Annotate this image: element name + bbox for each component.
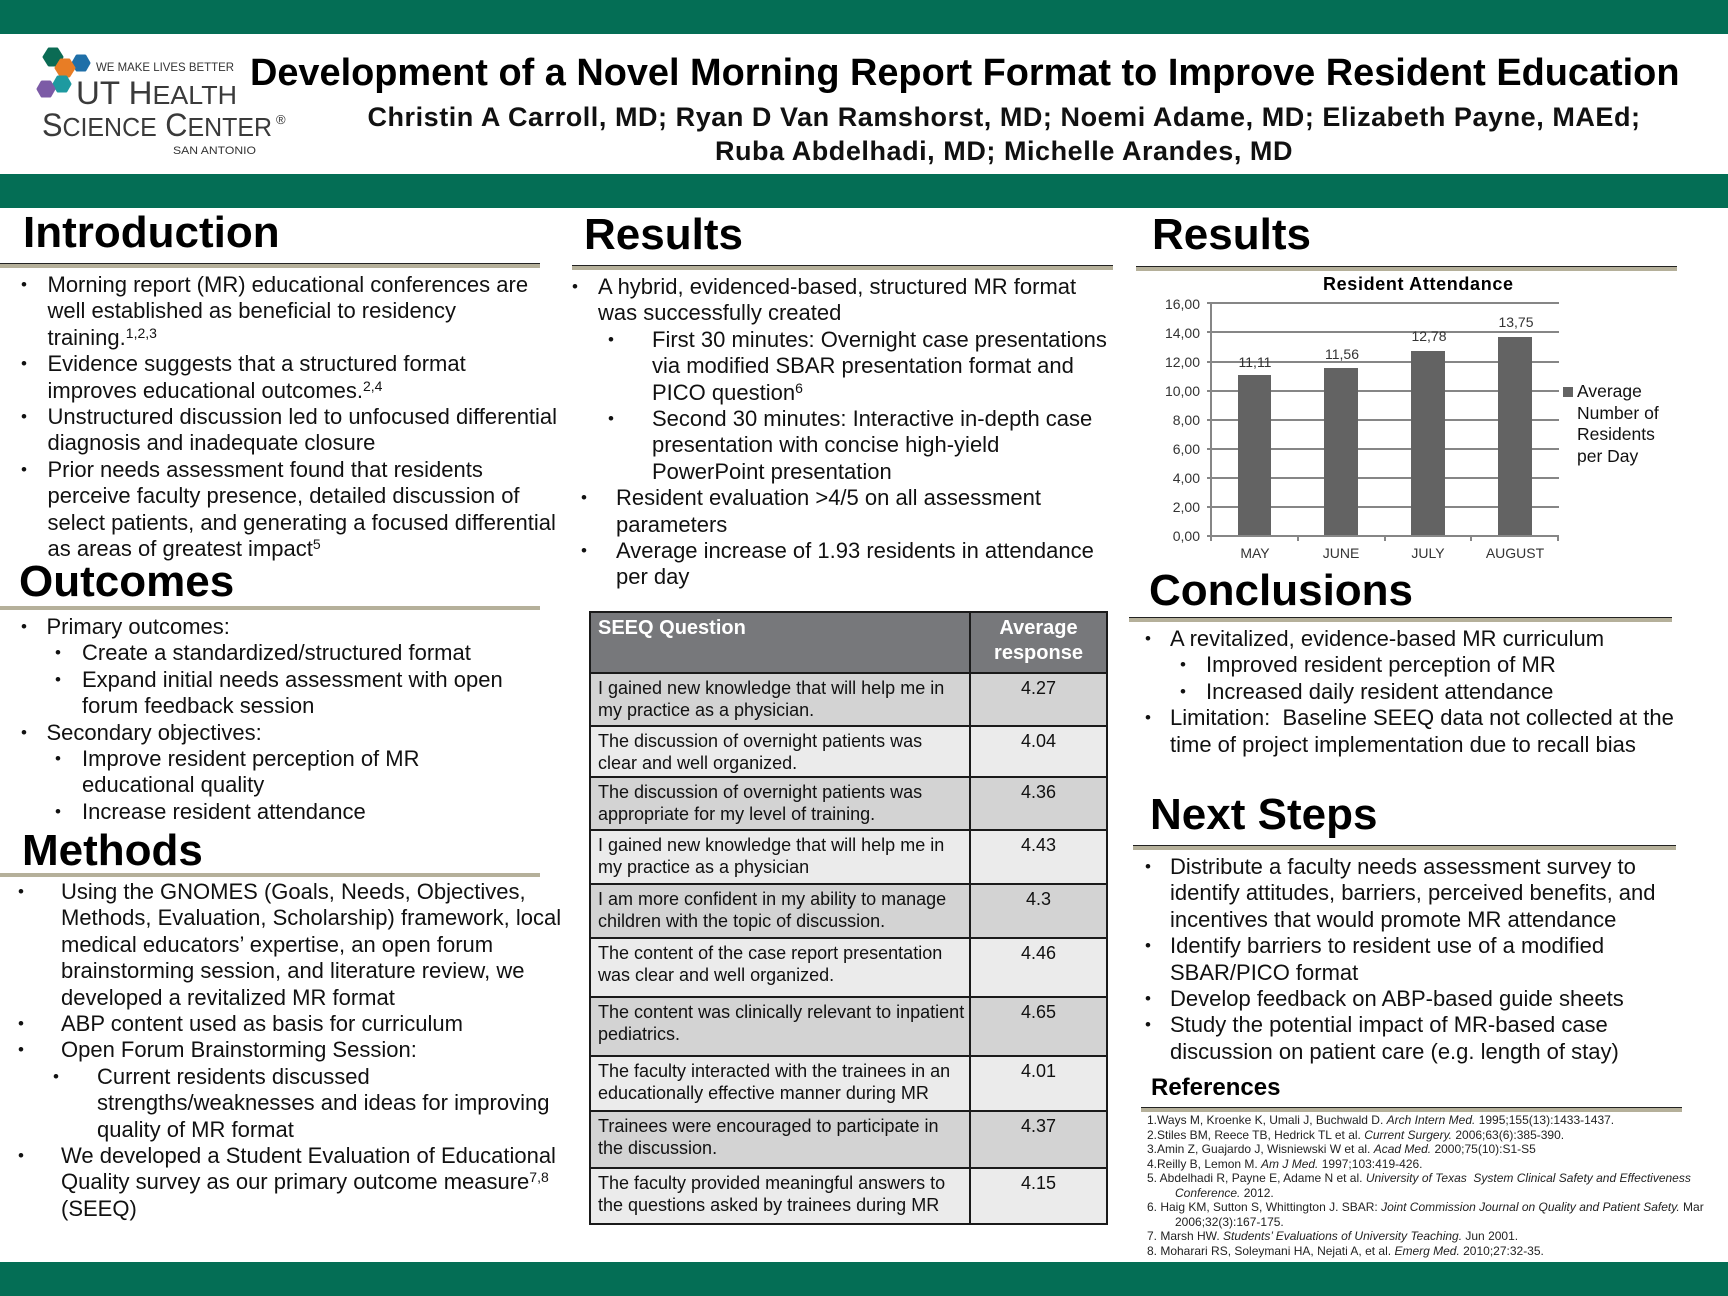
table: SEEQ question average responses: I am more confident in my ability to manage: [598, 889, 946, 909]
table: SEEQ question average responses: my practice as a physician.: [598, 700, 814, 720]
introduction bullets: •: [21, 275, 27, 294]
table: SEEQ question average responses: I gained new knowledge that will help me in: [598, 835, 944, 855]
results bullets: •: [608, 409, 614, 428]
methods bullets: medical educators’ expertise, an open forum: [61, 932, 493, 957]
results bullets: •: [581, 488, 587, 507]
introduction bullets: •: [21, 354, 27, 373]
table: SEEQ question average responses: SEEQ Question: [598, 617, 746, 639]
outcomes bullets: Create a standardized/structured format: [82, 640, 471, 665]
introduction bullets: training.1,2,3: [48, 325, 157, 350]
table: SEEQ question average responses: Average: [999, 617, 1078, 639]
data labels: 11,56: [1325, 346, 1359, 362]
table: SEEQ question average responses: clear and well organized.: [598, 753, 797, 773]
y axis labels: 10,00: [1165, 383, 1200, 399]
introduction bullets: Morning report (MR) educational conferences are: [48, 272, 528, 297]
methods bullets: •: [18, 1146, 24, 1165]
results bullets: PICO question6: [652, 380, 803, 405]
table: SEEQ question average responses: The faculty provided meaningful answers to: [598, 1173, 945, 1193]
next steps bullets: Develop feedback on ABP-based guide sheets: [1170, 986, 1624, 1011]
panel: methods: [0, 826, 561, 1221]
methods bullets: developed a revitalized MR format: [61, 985, 395, 1010]
next steps bullets: •: [1145, 1015, 1151, 1034]
results bullets: •: [608, 330, 614, 349]
authors: [367, 102, 1641, 166]
top green band: [0, 0, 1728, 34]
reference list: 4.Reilly B, Lemon M. Am J Med. 1997;103:419-426.: [1147, 1156, 1422, 1170]
methods bullets: •: [18, 1040, 24, 1059]
heading: Results: Results: [1152, 210, 1311, 259]
reference list: 6. Haig KM, Sutton S, Whittington J. SBAR: Joint Commission Journal on Quality and Patient Safety. Mar: [1147, 1200, 1704, 1214]
table: SEEQ question average responses: I gained new knowledge that will help me in: [598, 678, 944, 698]
heading: Conclusions: Conclusions: [1149, 566, 1413, 615]
outcomes bullets: •: [55, 670, 61, 689]
introduction bullets: •: [21, 460, 27, 479]
table: SEEQ question average responses: The discussion of overnight patients was: [598, 731, 922, 751]
outcomes bullets: Expand initial needs assessment with open: [82, 667, 503, 692]
reference list: 2.Stiles BM, Reece TB, Hedrick TL et al. Current Surgery. 2006;63(6):385-390.: [1147, 1128, 1564, 1142]
x axis labels: [1240, 545, 1545, 561]
table: SEEQ question average responses: The content was clinically relevant to inpatient: [598, 1002, 964, 1022]
heading: Methods: Methods: [22, 826, 203, 875]
y axis labels: [1165, 296, 1200, 544]
methods bullets: (SEEQ): [61, 1196, 137, 1221]
conclusions bullets: •: [1180, 655, 1186, 674]
y axis labels: 16,00: [1165, 296, 1200, 312]
bar chart: resident attendance: [1165, 274, 1659, 561]
panel: results chart: [1136, 210, 1677, 561]
table: SEEQ question average responses: 4.37: [1021, 1116, 1056, 1136]
reference list: 8. Moharari RS, Soleymani HA, Nejati A, et al. Emerg Med. 2010;27:32-35.: [1147, 1244, 1544, 1258]
table: SEEQ question average responses: pediatrics.: [598, 1024, 680, 1044]
chart title: Resident Attendance: [1323, 274, 1513, 294]
x axis labels: JULY: [1411, 545, 1445, 561]
x axis labels: JUNE: [1323, 545, 1359, 561]
table: SEEQ question average responses: 4.65: [1021, 1002, 1056, 1022]
reference list: Conference. 2012.: [1175, 1186, 1274, 1200]
y axis labels: 8,00: [1173, 412, 1200, 428]
y axis labels: 2,00: [1173, 499, 1200, 515]
conclusions bullets: Increased daily resident attendance: [1206, 679, 1553, 704]
table: SEEQ question average responses: appropriate for my level of training.: [598, 804, 875, 824]
panel: outcomes: [0, 557, 540, 824]
y axis labels: 14,00: [1165, 325, 1200, 341]
university logo: SCIENCE CENTER: [42, 107, 272, 143]
bars: [1238, 337, 1532, 535]
university logo: WE MAKE LIVES BETTER: [96, 62, 234, 74]
introduction bullets: diagnosis and inadequate closure: [48, 430, 375, 455]
table: SEEQ question average responses: 4.01: [1021, 1061, 1056, 1081]
next steps bullets: incentives that would promote MR attendance: [1170, 907, 1616, 932]
table: SEEQ question average responses: 4.04: [1021, 731, 1056, 751]
results bullets: PowerPoint presentation: [652, 459, 892, 484]
table: SEEQ question average responses: educationally effective manner during MR: [598, 1083, 929, 1103]
introduction bullets: perceive faculty presence, detailed discussion of: [48, 483, 520, 508]
reference list: 2006;32(3):167-175.: [1175, 1214, 1284, 1228]
next steps bullets: identify attitudes, barriers, perceived benefits, and: [1170, 880, 1656, 905]
table: SEEQ question average responses: 4.43: [1021, 835, 1056, 855]
authors: Christin A Carroll, MD; Ryan D Van Ramshorst, MD; Noemi Adame, MD; Elizabeth Payne, MAEd;: [367, 102, 1641, 132]
heading: References: References: [1151, 1074, 1280, 1101]
data labels: 12,78: [1411, 328, 1447, 344]
introduction bullets: as areas of greatest impact5: [48, 536, 321, 561]
next steps bullets: discussion on patient care (e.g. length of stay): [1170, 1039, 1619, 1064]
panel: introduction: [0, 208, 557, 561]
reference list: 7. Marsh HW. Students’ Evaluations of University Teaching. Jun 2001.: [1147, 1229, 1518, 1243]
legend: Residents: [1577, 424, 1655, 444]
legend: per Day: [1577, 446, 1639, 466]
conclusions bullets: •: [1145, 708, 1151, 727]
panel: conclusions: [1129, 566, 1674, 757]
methods bullets: quality of MR format: [97, 1117, 294, 1142]
methods bullets: [18, 879, 561, 1221]
outcomes bullets: educational quality: [82, 772, 264, 797]
heading: Outcomes: Outcomes: [19, 557, 234, 606]
table: SEEQ question average responses: 4.36: [1021, 782, 1056, 802]
conclusions bullets: time of project implementation due to recall bias: [1170, 732, 1636, 757]
table: SEEQ question average responses: 4.15: [1021, 1173, 1056, 1193]
reference list: 5. Abdelhadi R, Payne E, Adame N et al. University of Texas System Clinical Safety and Effectiveness: [1147, 1171, 1691, 1185]
methods bullets: strengths/weaknesses and ideas for improving: [97, 1090, 549, 1115]
results bullets: •: [581, 541, 587, 560]
methods bullets: •: [18, 882, 24, 901]
next steps bullets: [1145, 854, 1656, 1064]
legend: [1563, 381, 1659, 466]
methods bullets: ABP content used as basis for curriculum: [61, 1011, 463, 1036]
reference list: [1147, 1113, 1704, 1258]
title: Development of a Novel Morning Report Format to Improve Resident Education: [250, 52, 1679, 94]
y axis labels: 6,00: [1173, 441, 1200, 457]
green band below header: [0, 174, 1728, 208]
outcomes bullets: Primary outcomes:: [46, 614, 230, 639]
table: SEEQ question average responses: was clear and well organized.: [598, 965, 834, 985]
results bullets: per day: [616, 564, 689, 589]
methods bullets: brainstorming session, and literature review, we: [61, 958, 524, 983]
results bullets: First 30 minutes: Overnight case presentations: [652, 327, 1107, 352]
outcomes bullets: Increase resident attendance: [82, 799, 366, 824]
methods bullets: We developed a Student Evaluation of Educational: [61, 1143, 556, 1168]
next steps bullets: •: [1145, 936, 1151, 955]
data labels: 11,11: [1239, 354, 1272, 370]
introduction bullets: Evidence suggests that a structured format: [48, 351, 466, 376]
outcomes bullets: •: [55, 643, 61, 662]
results bullets: presentation with concise high-yield: [652, 432, 999, 457]
university logo: SAN ANTONIO: [173, 145, 256, 157]
table: SEEQ question average responses: The discussion of overnight patients was: [598, 782, 922, 802]
conclusions bullets: Limitation: Baseline SEEQ data not collected at the: [1170, 705, 1674, 730]
conclusions bullets: [1145, 626, 1674, 757]
outcomes bullets: [21, 614, 503, 824]
introduction bullets: Unstructured discussion led to unfocused differential: [48, 404, 557, 429]
data labels: 13,75: [1498, 314, 1534, 330]
conclusions bullets: •: [1145, 629, 1151, 648]
conclusions bullets: •: [1180, 682, 1186, 701]
results bullets: Average increase of 1.93 residents in attendance: [616, 538, 1094, 563]
introduction bullets: [21, 272, 557, 561]
table: SEEQ question average responses: [589, 611, 1108, 1225]
conclusions bullets: A revitalized, evidence-based MR curriculum: [1170, 626, 1604, 651]
heading: Next Steps: Next Steps: [1150, 790, 1377, 839]
next steps bullets: Distribute a faculty needs assessment survey to: [1170, 854, 1636, 879]
results bullets: Second 30 minutes: Interactive in-depth case: [652, 406, 1092, 431]
heading: Results: Results: [584, 210, 743, 259]
table: SEEQ question average responses: 4.46: [1021, 943, 1056, 963]
table: SEEQ question average responses: Trainees were encouraged to participate in: [598, 1116, 939, 1136]
y axis labels: 4,00: [1173, 470, 1200, 486]
university logo: [36, 48, 286, 157]
results bullets: parameters: [616, 512, 727, 537]
table: SEEQ question average responses: the discussion.: [598, 1138, 717, 1158]
x axis labels: MAY: [1240, 545, 1270, 561]
x axis labels: AUGUST: [1486, 545, 1545, 561]
table: SEEQ question average responses: children with the topic of discussion.: [598, 911, 885, 931]
outcomes bullets: •: [21, 617, 27, 636]
next steps bullets: SBAR/PICO format: [1170, 960, 1358, 985]
table: SEEQ question average responses: 4.27: [1021, 678, 1056, 698]
y axis labels: 0,00: [1173, 528, 1200, 544]
table: SEEQ question average responses: The content of the case report presentation: [598, 943, 942, 963]
methods bullets: Methods, Evaluation, Scholarship) framework, local: [61, 905, 561, 930]
y axis labels: 12,00: [1165, 354, 1200, 370]
methods bullets: Using the GNOMES (Goals, Needs, Objectives,: [61, 879, 526, 904]
heading: Introduction: Introduction: [23, 208, 280, 257]
university logo: UT HEALTH: [76, 75, 237, 111]
next steps bullets: Study the potential impact of MR-based case: [1170, 1012, 1608, 1037]
introduction bullets: •: [21, 407, 27, 426]
methods bullets: Current residents discussed: [97, 1064, 370, 1089]
authors: Ruba Abdelhadi, MD; Michelle Arandes, MD: [715, 136, 1293, 166]
next steps bullets: •: [1145, 989, 1151, 1008]
panel: references: [1141, 1074, 1704, 1258]
results bullets: •: [572, 277, 578, 296]
introduction bullets: Prior needs assessment found that residents: [48, 457, 483, 482]
table: SEEQ question average responses: my practice as a physician: [598, 857, 809, 877]
methods bullets: Open Forum Brainstorming Session:: [61, 1037, 417, 1062]
reference list: 1.Ways M, Kroenke K, Umali J, Buchwald D. Arch Intern Med. 1995;155(13):1433-1437.: [1147, 1113, 1614, 1127]
introduction bullets: improves educational outcomes.2,4: [48, 378, 382, 403]
methods bullets: •: [53, 1067, 59, 1086]
table: SEEQ question average responses: the questions asked by trainees during MR: [598, 1195, 939, 1215]
results bullets: via modified SBAR presentation format and: [652, 353, 1074, 378]
results bullets: A hybrid, evidenced-based, structured MR format: [598, 274, 1076, 299]
outcomes bullets: forum feedback session: [82, 693, 314, 718]
next steps bullets: Identify barriers to resident use of a modified: [1170, 933, 1604, 958]
table: SEEQ question average responses: The faculty interacted with the trainees in an: [598, 1061, 950, 1081]
outcomes bullets: Improve resident perception of MR: [82, 746, 420, 771]
data labels: [1239, 314, 1534, 370]
university logo: ®: [276, 112, 286, 127]
panel: results text: [572, 210, 1113, 589]
results bullets: [572, 274, 1107, 589]
methods bullets: •: [18, 1014, 24, 1033]
outcomes bullets: •: [55, 749, 61, 768]
outcomes bullets: •: [21, 723, 27, 742]
legend: Number of: [1577, 403, 1659, 423]
reference list: 3.Amin Z, Guajardo J, Wisniewski W et al. Acad Med. 2000;75(10):S1-S5: [1147, 1142, 1536, 1156]
table: SEEQ question average responses: response: [994, 642, 1083, 664]
introduction bullets: select patients, and generating a focused differential: [48, 510, 556, 535]
results bullets: Resident evaluation >4/5 on all assessment: [616, 485, 1041, 510]
methods bullets: Quality survey as our primary outcome measure7,8: [61, 1169, 549, 1194]
conclusions bullets: Improved resident perception of MR: [1206, 652, 1556, 677]
table: SEEQ question average responses: 4.3: [1026, 889, 1051, 909]
legend: Average: [1577, 381, 1642, 401]
next steps bullets: •: [1145, 857, 1151, 876]
results bullets: was successfully created: [598, 300, 841, 325]
outcomes bullets: Secondary objectives:: [46, 720, 262, 745]
bottom green band: [0, 1262, 1728, 1296]
outcomes bullets: •: [55, 802, 61, 821]
introduction bullets: well established as beneficial to residency: [48, 298, 456, 323]
panel: next steps: [1133, 790, 1676, 1064]
